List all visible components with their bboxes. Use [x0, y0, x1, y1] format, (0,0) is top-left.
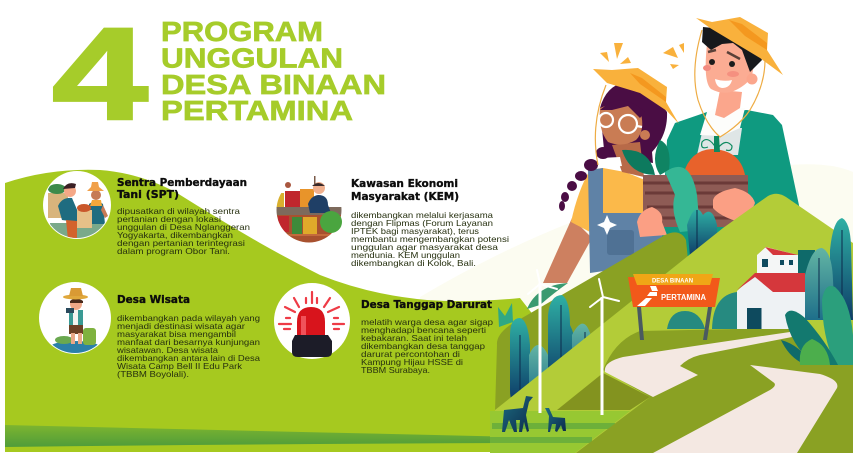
shirt	[571, 168, 645, 232]
text: KEM: dengan Flipmas (Forum Layanan	[351, 219, 494, 228]
text: Desa Wisata: (TBBM Boyolali).	[117, 370, 189, 379]
text: KEM: unggulan agar masyarakat desa	[351, 243, 499, 252]
face	[706, 36, 756, 93]
tendrils	[702, 140, 732, 150]
trees: right group	[798, 218, 853, 320]
text: KEM: membantu mengembangkan potensi	[351, 235, 509, 244]
neck	[715, 90, 742, 118]
text: Desa Wisata: dikembangkan pada wilayah yang	[117, 314, 261, 323]
heading: KEM: Kawasan Ekonomi	[351, 177, 458, 190]
road	[605, 332, 837, 453]
bottom dark green band	[5, 425, 520, 447]
illustration: woman farmer	[543, 68, 679, 283]
text: Desa Wisata: manfaat dari besarnya kunjungan	[117, 338, 261, 347]
text: Desa Wisata: menjadi destinasi wisata agar	[117, 322, 245, 331]
trees: left group	[510, 209, 717, 400]
face features	[703, 50, 740, 88]
icon: tourist	[39, 282, 111, 355]
text: SPT	[117, 207, 251, 256]
field stripes	[490, 423, 615, 443]
house body	[737, 275, 805, 329]
text: KEM	[351, 211, 509, 268]
plants: left leaves	[498, 283, 568, 327]
hill: light green main hill	[495, 194, 853, 453]
icon: market stall	[276, 176, 342, 245]
hill: olive back hill	[495, 232, 688, 412]
hill: dark shade	[557, 373, 650, 410]
field	[490, 411, 630, 453]
title: PERTAMINA	[161, 95, 353, 126]
text: Desa Tanggap Darurat: kebakaran. Saat ini telah	[361, 334, 468, 343]
heading: KEM: Masyarakat (KEM)	[351, 190, 459, 203]
hat strap	[595, 85, 606, 165]
title: PROGRAM	[161, 16, 323, 47]
heading: SPT: Tani (SPT)	[117, 188, 179, 201]
text: Desa Wisata: dikembangkan antara lain di Desa	[117, 354, 261, 363]
collar	[600, 157, 622, 168]
illustration: man farmer	[660, 17, 800, 262]
icon: siren	[274, 283, 350, 359]
pumpkin	[683, 149, 745, 175]
basket	[643, 175, 748, 227]
hat band	[630, 73, 666, 102]
heading: SPT	[117, 176, 247, 201]
deer: large	[502, 396, 533, 432]
illustration: sparkles	[600, 43, 684, 69]
overalls	[588, 168, 667, 273]
illustration: basket with pumpkin and plant	[622, 136, 755, 237]
text: Desa Wisata: wisatawan. Desa wisata	[116, 346, 219, 355]
text: Desa Wisata: Wisata Camp Bell II Edu Park	[117, 362, 243, 371]
sign header text: DESA BINAAN	[652, 278, 693, 284]
undershirt	[697, 128, 742, 155]
door	[747, 308, 762, 329]
heading: SPT: Sentra Pemberdayaan	[117, 176, 247, 189]
text: Desa Tanggap Darurat: TBBM Surabaya.	[361, 366, 430, 375]
arm	[543, 218, 592, 283]
sign text: PERTAMINA	[661, 293, 706, 302]
jacket	[660, 110, 800, 262]
text: KEM: dikembangkan melalui kerjasama	[351, 211, 494, 220]
sign board	[628, 277, 720, 307]
text: KEM: IPTEK bagi masyarakat), terus	[351, 227, 479, 236]
ear	[746, 74, 758, 84]
pumpkin stem	[714, 136, 720, 152]
collar	[700, 108, 745, 136]
text: KEM: dikembangkan di Kolok, Bali.	[351, 259, 476, 268]
text: Desa Tanggap Darurat: menghadapi bencana seperti	[361, 326, 486, 335]
text: Desa Tanggap Darurat: dikembangkan desa tanggap	[361, 342, 486, 351]
heading: Desa Wisata: Desa Wisata	[117, 293, 190, 306]
hair	[702, 27, 762, 72]
text: SPT: pertanian dengan lokasi	[117, 215, 221, 224]
title: DESA BINAAN	[161, 69, 386, 100]
sparkle	[597, 215, 617, 235]
plants: right leaves	[781, 286, 853, 365]
title: UNGGULAN	[161, 42, 343, 74]
heading: KEM	[351, 177, 459, 203]
text: Desa Wisata: masyarakat bisa mengambil	[117, 330, 236, 339]
panel: KEM	[276, 176, 509, 268]
hat strap	[695, 30, 765, 137]
text: Desa Tanggap Darurat: melatih warga desa agar sigap	[361, 318, 494, 327]
face	[600, 103, 642, 145]
text: SPT: unggulan di Desa Nglanggeran	[117, 223, 251, 232]
background cream hill	[420, 164, 853, 310]
text: SPT: Yogyakarta, dikembangkan	[117, 231, 234, 240]
sign header	[633, 274, 713, 285]
hat	[696, 17, 783, 75]
heading: Desa Tanggap Darurat: Desa Tanggap Darurat	[361, 298, 492, 311]
woman's hand	[637, 207, 667, 237]
glasses	[599, 113, 642, 133]
sign legs	[637, 307, 712, 340]
text: SPT: dipusatkan di wilayah sentra	[117, 207, 241, 216]
braid	[559, 147, 610, 211]
upper roof	[765, 247, 798, 255]
ear	[640, 130, 650, 140]
hat band	[729, 20, 767, 50]
pertamina logo	[637, 286, 658, 306]
house	[737, 247, 805, 329]
basket stripes	[643, 183, 748, 218]
pocket	[607, 230, 634, 255]
neck	[612, 142, 644, 177]
green wave background	[5, 170, 640, 452]
icon: farmers	[43, 171, 111, 241]
text: Desa Tanggap Darurat: Kampung Hijau HSSE di	[361, 358, 463, 367]
title	[161, 16, 386, 126]
text: Desa Tanggap Darurat	[361, 318, 494, 375]
text: SPT: dalam program Obor Tani.	[117, 247, 230, 256]
text: Desa Wisata	[116, 314, 261, 379]
panel: SPT	[43, 171, 251, 256]
fringe	[600, 100, 645, 118]
windmill: right	[590, 279, 619, 415]
man's hand	[713, 188, 755, 221]
leaves	[622, 140, 700, 232]
upper floor	[757, 247, 798, 277]
hill: olive foreground	[576, 328, 853, 453]
text: Desa Tanggap Darurat: darurat percontohan di	[361, 350, 460, 359]
hair	[600, 82, 667, 163]
white page margin right	[853, 0, 855, 455]
title number 4: 4	[52, 0, 148, 147]
text: KEM: mendunia. KEM unggulan	[351, 251, 461, 260]
sign: Desa Binaan Pertamina	[628, 274, 720, 340]
deer: small	[545, 408, 566, 432]
windmill: left	[528, 270, 557, 413]
text: SPT: dengan pertanian terintegrasi	[117, 239, 245, 248]
panel: Desa Wisata	[39, 282, 261, 379]
windows	[762, 259, 793, 267]
bushes behind house	[667, 292, 740, 329]
panel: Desa Tanggap Darurat	[274, 283, 494, 375]
main roof	[737, 273, 805, 292]
hat	[593, 68, 679, 124]
